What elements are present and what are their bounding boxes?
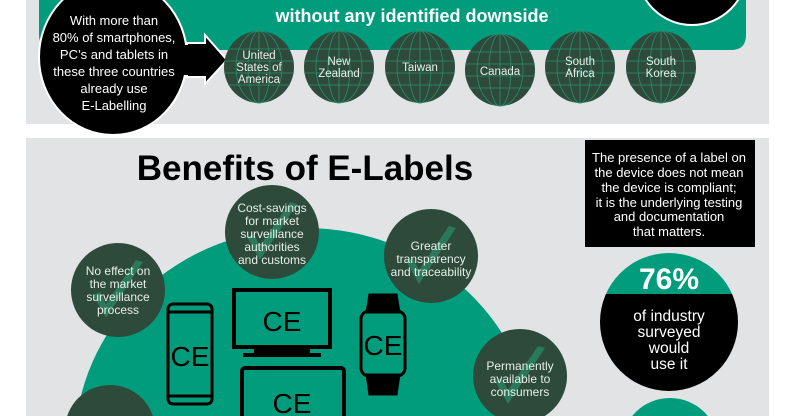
benefit circles: consumers bbox=[491, 385, 549, 399]
banner text: without any identified downside bbox=[274, 6, 548, 26]
globes: Africa bbox=[565, 68, 595, 80]
stat circle 76% bbox=[600, 253, 740, 394]
globes: South bbox=[565, 56, 595, 68]
benefit circles: surveillance bbox=[86, 290, 150, 304]
callout bubble bbox=[39, 0, 227, 135]
globes: South bbox=[646, 56, 676, 68]
globes: Taiwan bbox=[402, 62, 438, 74]
callout bubble: these three countries bbox=[53, 64, 175, 79]
green blob bbox=[75, 228, 535, 416]
callout bubble: PC’s and tablets in bbox=[60, 47, 168, 62]
benefit circles: authorities bbox=[244, 240, 300, 254]
note box: it is the underlying testing bbox=[596, 195, 742, 210]
note box: that matters. bbox=[633, 224, 705, 239]
stat circle 76%: would bbox=[648, 340, 689, 357]
globes: United bbox=[242, 50, 276, 62]
benefit circles: No effect on bbox=[86, 264, 150, 278]
benefit circles: and customs bbox=[238, 253, 306, 267]
benefit circles bbox=[65, 185, 567, 416]
panel: benefits: CE bbox=[364, 330, 402, 361]
globes: Canada bbox=[480, 66, 521, 78]
note box: The presence of a label on bbox=[592, 150, 746, 165]
black circle top right bbox=[637, 0, 747, 25]
benefit circles: for market bbox=[245, 214, 300, 228]
benefit circles: available to bbox=[490, 372, 551, 386]
green banner bbox=[39, 0, 746, 50]
globes: New bbox=[327, 56, 351, 68]
globes: Korea bbox=[646, 68, 677, 80]
stat circle 76%: 76% bbox=[639, 263, 699, 296]
benefit circles: the market bbox=[90, 277, 147, 291]
stat circle 76%: of industry bbox=[633, 308, 705, 325]
callout bubble: E-Labelling bbox=[81, 98, 147, 113]
benefit circles: Permanently bbox=[486, 359, 554, 373]
panel: top countries bbox=[26, 0, 769, 135]
note box: the device does not mean bbox=[595, 165, 743, 180]
benefit circles: transparency bbox=[396, 252, 466, 266]
note box bbox=[585, 140, 755, 247]
stat circle 76%: surveyed bbox=[638, 324, 700, 341]
stat circle 76%: use it bbox=[650, 356, 688, 373]
callout bubble: 80% of smartphones, bbox=[53, 30, 175, 45]
globes: Zealand bbox=[318, 68, 360, 80]
panel: benefits bbox=[26, 138, 769, 416]
second stat circle bbox=[622, 398, 718, 416]
devices bbox=[168, 290, 405, 416]
panel: benefits: CE bbox=[171, 341, 209, 372]
title: Benefits of E-Labels bbox=[137, 149, 473, 188]
note box: and documentation bbox=[614, 209, 724, 224]
benefit circles: and traceability bbox=[391, 265, 471, 279]
benefit circles: Cost-savings bbox=[237, 201, 307, 215]
callout bubble: With more than bbox=[70, 13, 158, 28]
panel: benefits: CE bbox=[263, 306, 301, 337]
benefit circles: Greater bbox=[411, 239, 451, 253]
globes: States of bbox=[236, 62, 282, 74]
callout bubble: already use bbox=[80, 81, 148, 96]
note box: the device is compliant; bbox=[601, 180, 737, 195]
globes: America bbox=[238, 74, 281, 86]
globes bbox=[224, 31, 696, 106]
benefit circles: process bbox=[97, 303, 139, 317]
benefit circles: surveillance bbox=[240, 227, 304, 241]
